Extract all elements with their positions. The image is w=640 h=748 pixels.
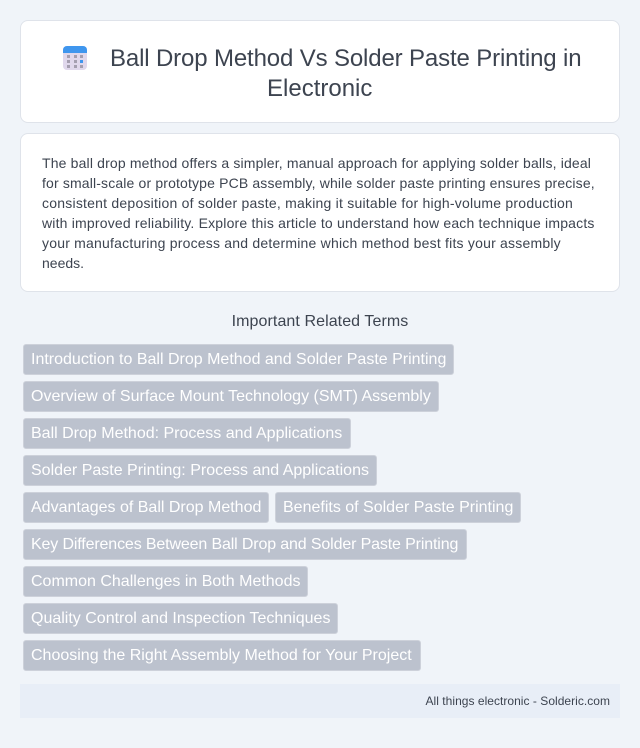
tag — [23, 418, 351, 449]
tag: Solder Paste Printing: Process and Applications — [31, 462, 369, 479]
footer — [20, 684, 620, 718]
tag: Advantages of Ball Drop Method — [31, 499, 261, 516]
header panel — [20, 20, 620, 123]
tag — [23, 603, 338, 634]
intro text: your manufacturing process and determine which method best fits your assembly — [42, 235, 561, 251]
footer text: All things electronic - Solderic.com — [426, 694, 610, 708]
title — [110, 45, 581, 102]
title: Electronic — [267, 75, 372, 102]
tag — [275, 492, 521, 523]
title: Ball Drop Method Vs Solder Paste Printing in — [110, 45, 581, 72]
tag — [23, 455, 377, 486]
tag: Benefits of Solder Paste Printing — [283, 499, 513, 516]
intro panel — [20, 133, 620, 292]
intro text: with improved reliability. Explore this article to understand how each technique impacts — [42, 215, 595, 231]
tag: Introduction to Ball Drop Method and Solder Paste Printing — [31, 351, 446, 368]
tag — [23, 640, 421, 671]
intro text: consistent deposition of solder paste, making it suitable for high-volume production — [42, 195, 573, 211]
intro text: The ball drop method offers a simpler, manual approach for applying solder balls, ideal — [42, 155, 591, 171]
heading: related terms: Important Related Terms — [232, 313, 408, 330]
tag: Quality Control and Inspection Techniques — [31, 610, 330, 627]
tag — [23, 492, 269, 523]
tag: Ball Drop Method: Process and Applications — [31, 425, 342, 442]
icon: calendar — [63, 46, 87, 70]
tag — [23, 381, 439, 412]
tag — [23, 566, 308, 597]
intro text: needs. — [42, 255, 84, 271]
intro text — [42, 155, 595, 271]
tag: Key Differences Between Ball Drop and Solder Paste Printing — [31, 536, 458, 553]
tag: Choosing the Right Assembly Method for Your Project — [31, 647, 412, 664]
tag: Common Challenges in Both Methods — [31, 573, 300, 590]
tag — [23, 529, 467, 560]
tag — [23, 344, 454, 375]
tag: Overview of Surface Mount Technology (SMT) Assembly — [31, 388, 431, 405]
intro text: for small-scale or prototype PCB assembly, while solder paste printing ensures precise, — [42, 175, 595, 191]
tag list — [23, 344, 521, 671]
